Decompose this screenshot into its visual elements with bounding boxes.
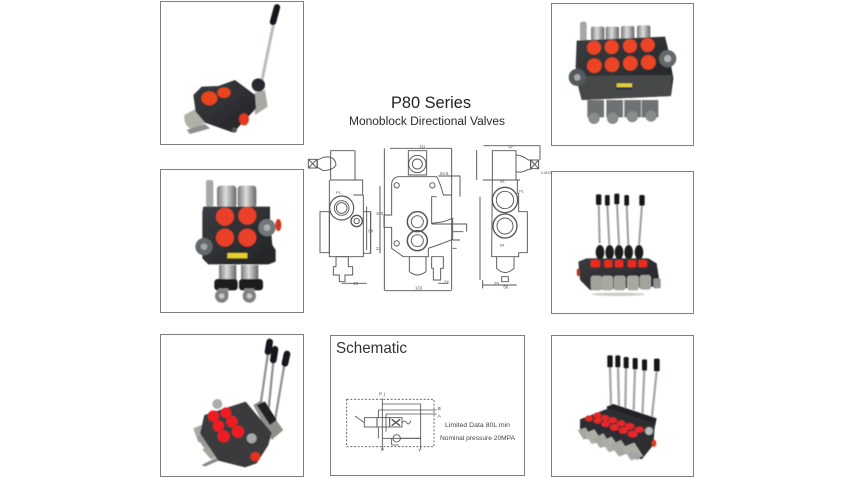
front view: 100 — [376, 211, 384, 216]
left side view: 84 — [368, 229, 374, 234]
schematic heading: Schematic — [336, 340, 407, 357]
front view: 133 — [415, 286, 423, 291]
hydraulic circuit diagram: P — [379, 391, 383, 397]
technical drawing: three valve views — [308, 144, 553, 291]
left side view: P1 — [336, 190, 342, 195]
title: P80 Series — [391, 94, 471, 112]
right side view: P1 — [519, 189, 525, 194]
panel: schematic — [330, 336, 524, 476]
panel: four-section valve photo — [552, 4, 694, 146]
right side view — [477, 144, 553, 289]
icon: three-lever valve — [193, 342, 287, 467]
icon: five-lever valve — [577, 194, 661, 296]
panel: five-lever valve photo — [552, 172, 694, 314]
front view: 111 — [419, 144, 426, 149]
hydraulic circuit diagram: A — [438, 413, 442, 418]
right side view: 56 — [503, 284, 509, 289]
right side view: 53 — [500, 179, 505, 184]
hydraulic circuit diagram: B — [438, 406, 441, 411]
panel: single-lever valve photo — [160, 2, 304, 144]
front view — [376, 144, 467, 291]
flow rating: Limited Data 80L min — [445, 422, 510, 429]
right side view: 29 — [494, 281, 499, 286]
right side view: 64 — [500, 242, 505, 247]
hydraulic circuit diagram — [347, 391, 442, 453]
panel: six-lever valve photo — [552, 336, 694, 476]
hydraulic circuit diagram: P — [381, 447, 384, 452]
front view: 54.5 — [440, 171, 449, 176]
right side view: 97 — [508, 144, 514, 149]
left side view — [308, 151, 374, 286]
right side view: 2-Ø10 — [541, 170, 553, 175]
icon: two-section valve — [195, 180, 281, 303]
hydraulic circuit diagram: T — [418, 448, 421, 453]
left side view: 26 — [353, 281, 359, 286]
pressure rating: Nominal pressure 20MPA — [440, 435, 516, 442]
icon: four-section valve — [569, 22, 676, 124]
panel: two-section valve photo — [160, 170, 304, 312]
subtitle: Monoblock Directional Valves — [349, 116, 505, 128]
icon: single-lever valve — [184, 7, 277, 134]
hydraulic circuit diagram: j — [383, 391, 385, 397]
icon: six-lever valve — [578, 355, 660, 461]
front view: 23 — [376, 246, 381, 251]
panel: three-lever valve photo — [160, 334, 304, 476]
front view: 24 — [444, 279, 449, 284]
